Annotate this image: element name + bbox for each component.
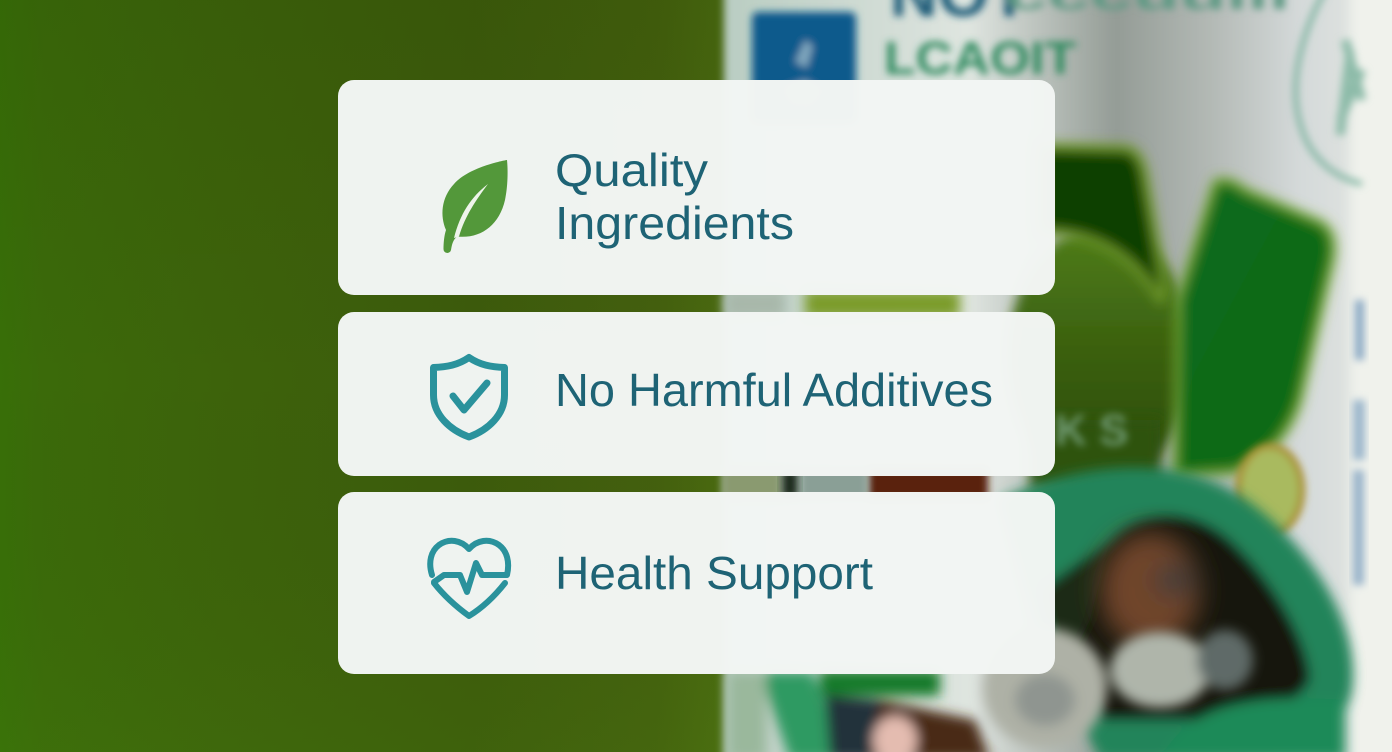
text: No Harmful Additives: No Harmful Additives — [555, 364, 993, 416]
gap strip content — [805, 290, 960, 318]
icon: shield with check — [434, 358, 504, 437]
text: Health Support: Health Support — [555, 547, 873, 599]
icon: green leaf — [442, 160, 508, 253]
blurred green bowl — [1000, 468, 1353, 752]
blurred olive round leaf — [1008, 227, 1192, 483]
blurred label: letters on leaf: K S — [1055, 406, 1128, 455]
text: Quality Ingredients: Ingredients — [555, 197, 794, 249]
text: Quality Ingredients — [555, 144, 794, 249]
icon: heart with pulse — [430, 541, 508, 616]
blurred dark leaf — [1040, 146, 1165, 300]
blurred label: blue badge — [752, 12, 856, 122]
text: Quality Ingredients: Quality — [555, 144, 708, 196]
blurred label: leaf emblem — [1296, 0, 1362, 184]
blurred lime slice — [1238, 446, 1302, 534]
card 1: Quality Ingredients — [338, 80, 1055, 295]
blurred contents of bowl — [1100, 532, 1200, 648]
blurred bright leaf — [1175, 180, 1334, 476]
card 2: No Harmful Additives — [338, 312, 1055, 476]
background: blurred green left panel — [0, 0, 730, 752]
card 3: Health Support — [338, 492, 1055, 674]
blurred label: side text — [1353, 300, 1365, 585]
blurred dark gap strip — [868, 468, 988, 500]
blurred label: bottle text: LCAOIT — [884, 32, 1076, 84]
background: blurred supplement bottle photo — [722, 0, 1392, 752]
blurred label: bottle text — [884, 0, 1290, 84]
